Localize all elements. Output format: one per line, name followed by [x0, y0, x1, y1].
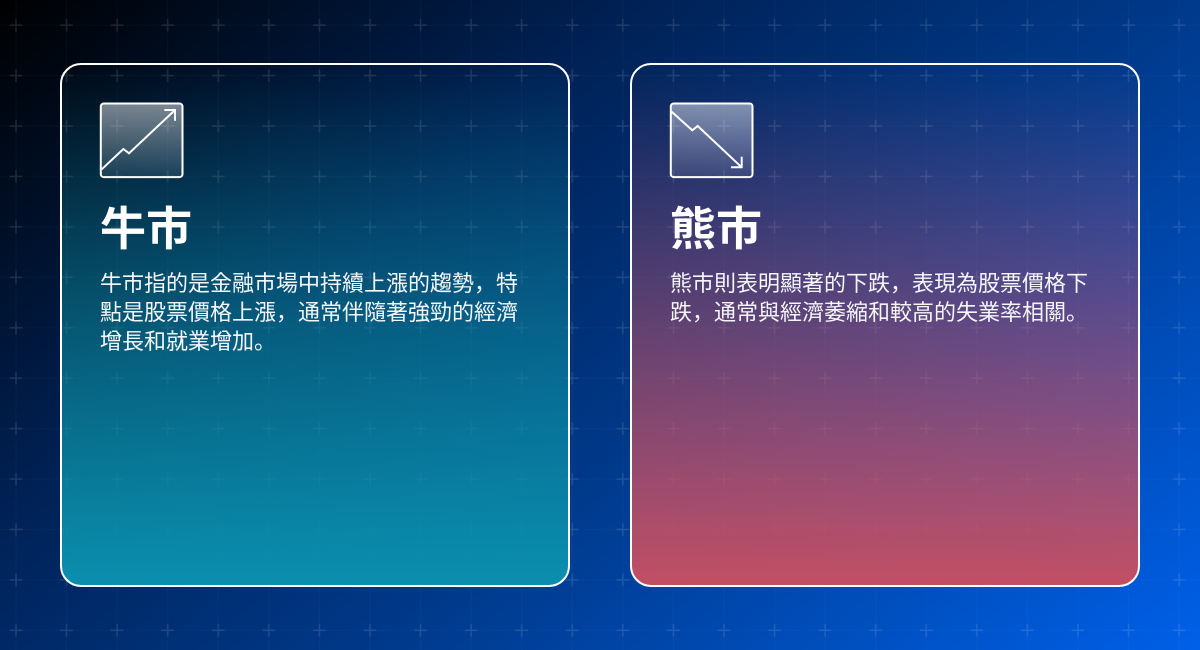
panel: bear market: [631, 64, 1139, 586]
icon: rising chart: [101, 104, 182, 177]
bear panel card: [631, 64, 1139, 586]
text block: bear market description: 跌，通常與經濟萎縮和較高的失業率相關。: [670, 300, 1088, 325]
text block: bull market description: 點是股票價格上漲，通常伴隨著強勁的經濟: [100, 300, 518, 325]
icon: falling chart: [671, 104, 752, 177]
heading: bull market: 牛市: [100, 203, 192, 255]
bull panel card: [61, 64, 569, 586]
panel: bull market: [61, 64, 569, 586]
heading: bear market: 熊市: [670, 203, 762, 255]
text block: bull market description: 牛市指的是金融市場中持續上漲的趨勢，特: [100, 271, 518, 296]
text block: bear market description: 熊市則表明顯著的下跌，表現為股票價格下: [670, 271, 1088, 296]
text block: bull market description: 增長和就業增加。: [100, 329, 276, 354]
